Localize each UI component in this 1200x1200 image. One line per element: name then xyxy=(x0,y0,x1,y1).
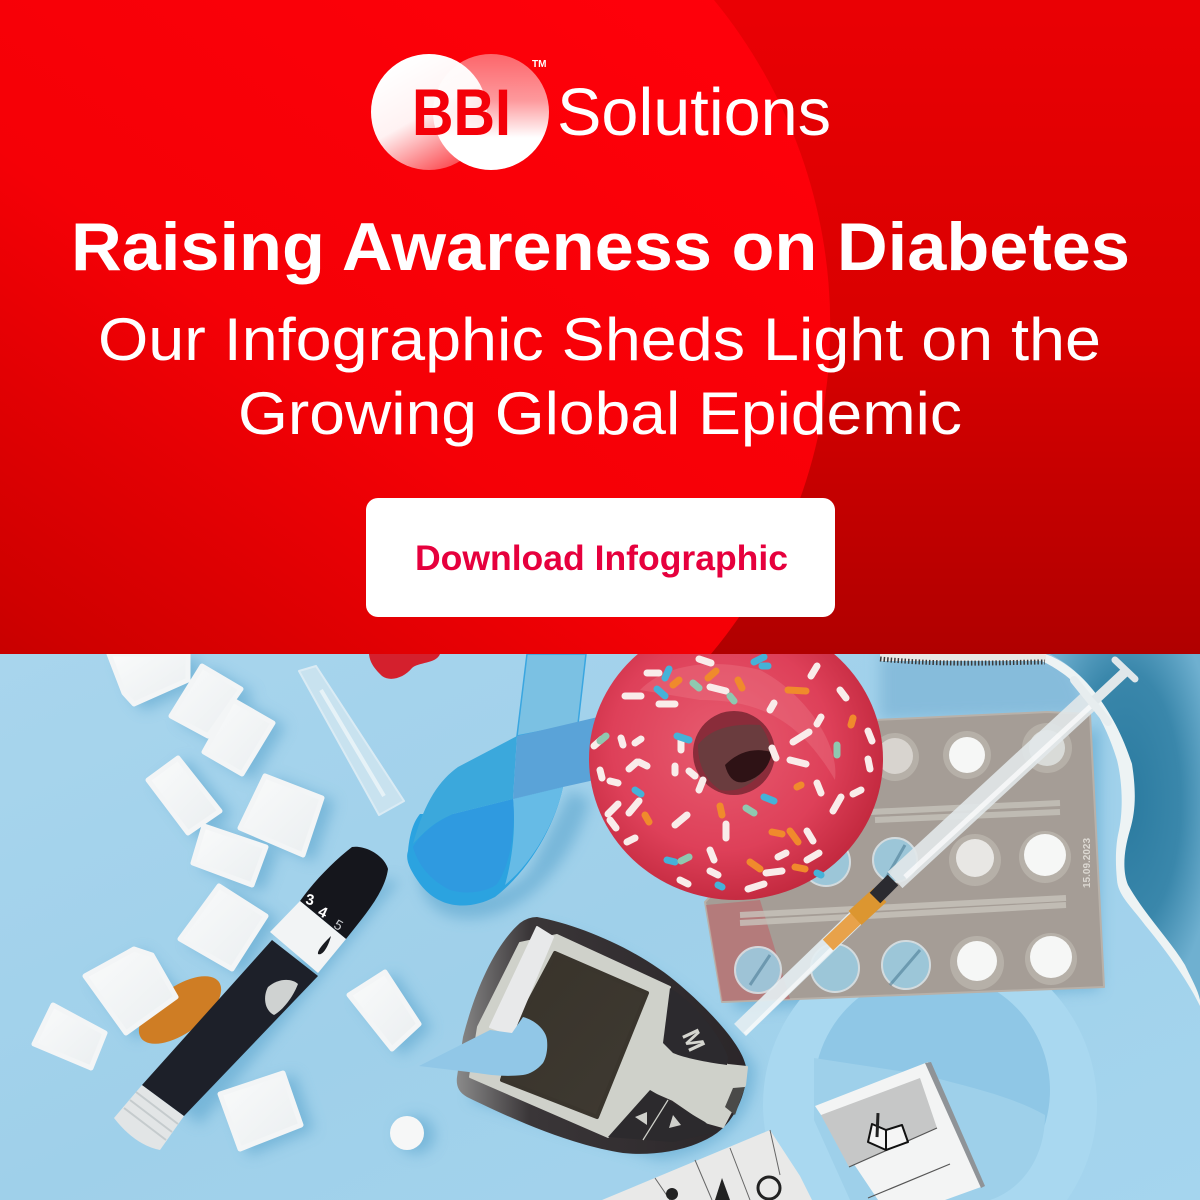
lancing device: 5 xyxy=(331,916,346,934)
panel: red header xyxy=(0,0,1200,654)
logo: BBI Solutions: BBI xyxy=(412,75,511,149)
logo: BBI Solutions xyxy=(371,54,831,170)
button: download infographic xyxy=(366,498,835,617)
lancing device: 4 xyxy=(315,903,331,922)
plastic tube xyxy=(299,666,404,815)
glucose meter xyxy=(457,917,747,1154)
logo: BBI Solutions: Solutions xyxy=(557,75,831,150)
test strip and paper drop xyxy=(419,927,553,1076)
subtitle xyxy=(98,306,1101,447)
notebook xyxy=(815,1062,985,1200)
paper ring xyxy=(763,990,1064,1124)
white pill xyxy=(390,1116,424,1150)
blister pack xyxy=(705,712,1104,1002)
awareness ribbon xyxy=(407,654,600,906)
title: Raising Awareness on Diabetes xyxy=(71,209,1130,285)
button: download infographic: Download Infographic xyxy=(415,539,788,578)
shadows xyxy=(92,658,1100,1160)
sugar cubes xyxy=(34,654,419,1149)
subtitle: Our Infographic Sheds Light on the xyxy=(98,306,1101,373)
donut xyxy=(589,654,883,900)
measuring tape xyxy=(880,654,1200,1006)
glucose meter: M xyxy=(676,1025,710,1056)
large sugar cube xyxy=(85,949,176,1033)
lancing device: 3 xyxy=(304,891,316,909)
subtitle: Growing Global Epidemic xyxy=(238,380,962,447)
sprinkles xyxy=(594,657,872,889)
syringe xyxy=(740,660,1135,1034)
orange candy xyxy=(138,976,222,1044)
lancing device xyxy=(114,847,388,1150)
blister pack: 15.09.2023 xyxy=(1082,838,1093,888)
paper chart xyxy=(602,1130,812,1200)
panel: photo of diabetes items xyxy=(0,618,1200,1200)
dark backdrop behind tape xyxy=(1050,654,1200,1005)
red gummy candy xyxy=(369,654,440,679)
logo: BBI Solutions: TM xyxy=(532,59,546,70)
